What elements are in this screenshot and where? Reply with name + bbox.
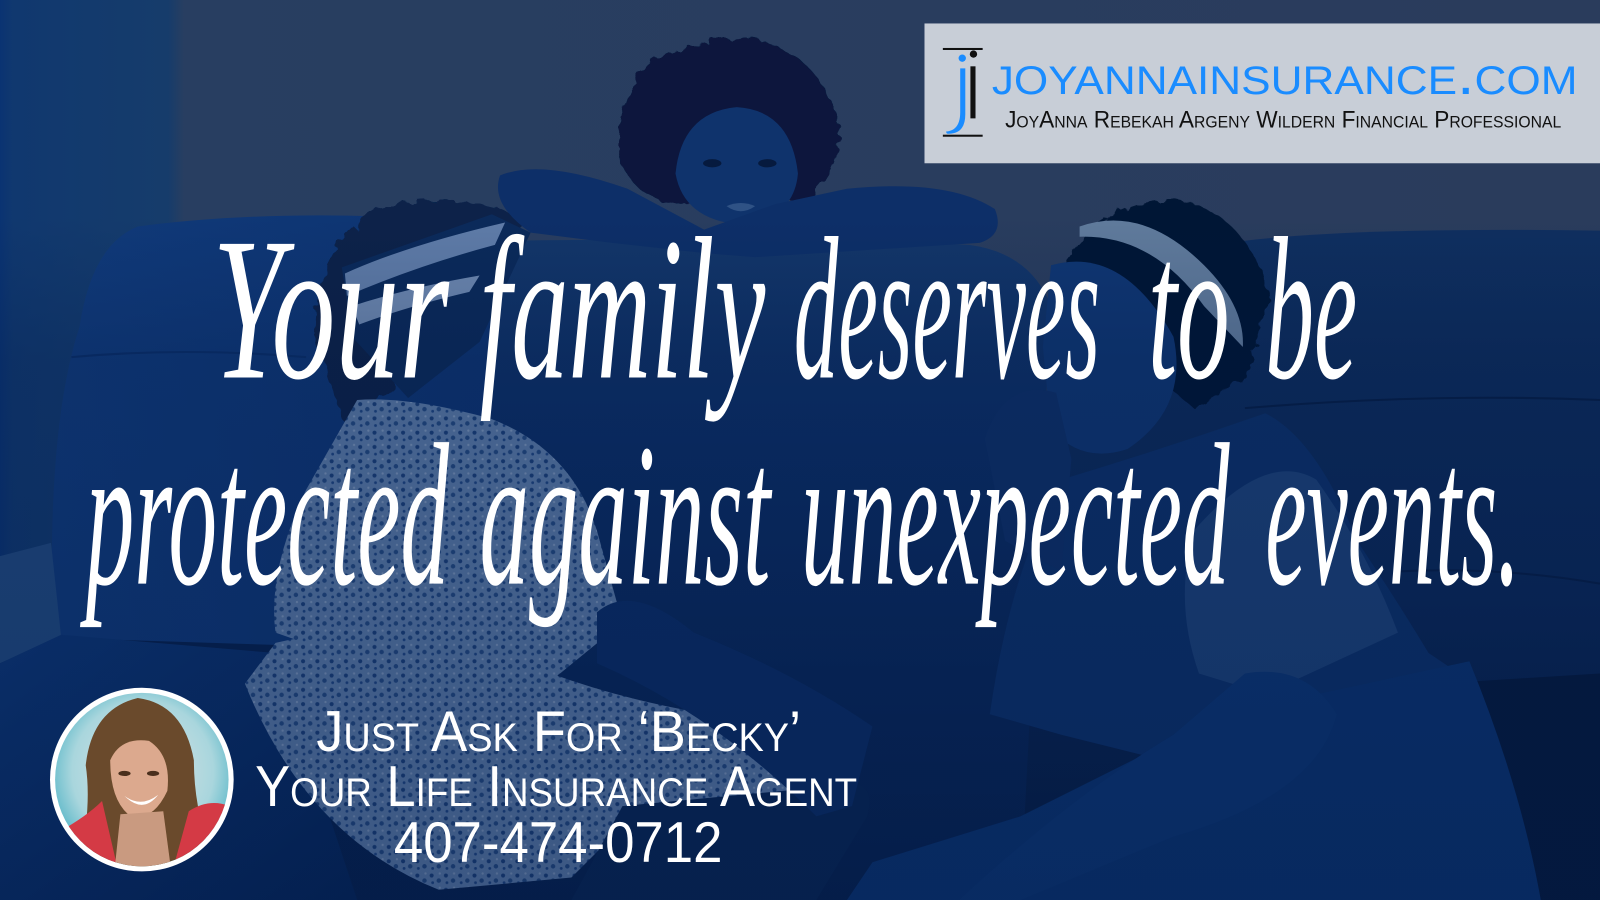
girl: arm	[597, 601, 872, 816]
phone number: 407-474-0712	[394, 811, 722, 875]
tagline: JoyAnna Rebekah Argeny Wildern Financial Professional	[1005, 107, 1561, 134]
woman: arm	[959, 672, 1337, 900]
logo panel	[924, 23, 1600, 163]
headline line 2: protected	[80, 403, 449, 629]
woman: skirt	[847, 661, 1541, 900]
line: just ask for Becky: Just Ask For ‘Becky’	[316, 700, 801, 764]
icon: ji monogram	[943, 48, 983, 137]
agent portrait	[50, 688, 235, 872]
woman: hair	[1066, 199, 1270, 408]
headline line 2	[80, 403, 1520, 629]
sofa: right back cushion	[980, 230, 1600, 900]
girl: dress top	[274, 399, 622, 714]
woman: face and hand	[1043, 262, 1177, 454]
headline line 1: deserves	[794, 197, 1100, 423]
boy: face	[676, 107, 798, 224]
girl: skirt	[245, 633, 827, 890]
girl: hair	[314, 201, 526, 429]
headline line 1: family	[480, 197, 766, 423]
sofa: left and centre back	[52, 215, 510, 673]
headline line 1: to	[1148, 197, 1230, 423]
website address: joyannainsurance.com	[992, 43, 1578, 107]
line: your life insurance agent: Your Life Insurance Agent	[255, 755, 857, 819]
girl: striped shirt	[342, 214, 531, 398]
woman: patterned headband	[1080, 221, 1243, 347]
headline line 2: against	[480, 403, 772, 629]
main headline: be	[1265, 197, 1357, 423]
woman: blouse	[990, 413, 1459, 755]
headline line 1	[212, 197, 1357, 423]
sofa: left seat	[0, 543, 61, 663]
boy: hair	[618, 37, 839, 204]
agent call to action	[255, 700, 857, 875]
boy: arms	[498, 169, 998, 257]
main headline	[80, 197, 1520, 629]
headline line 1: Your	[212, 197, 450, 423]
